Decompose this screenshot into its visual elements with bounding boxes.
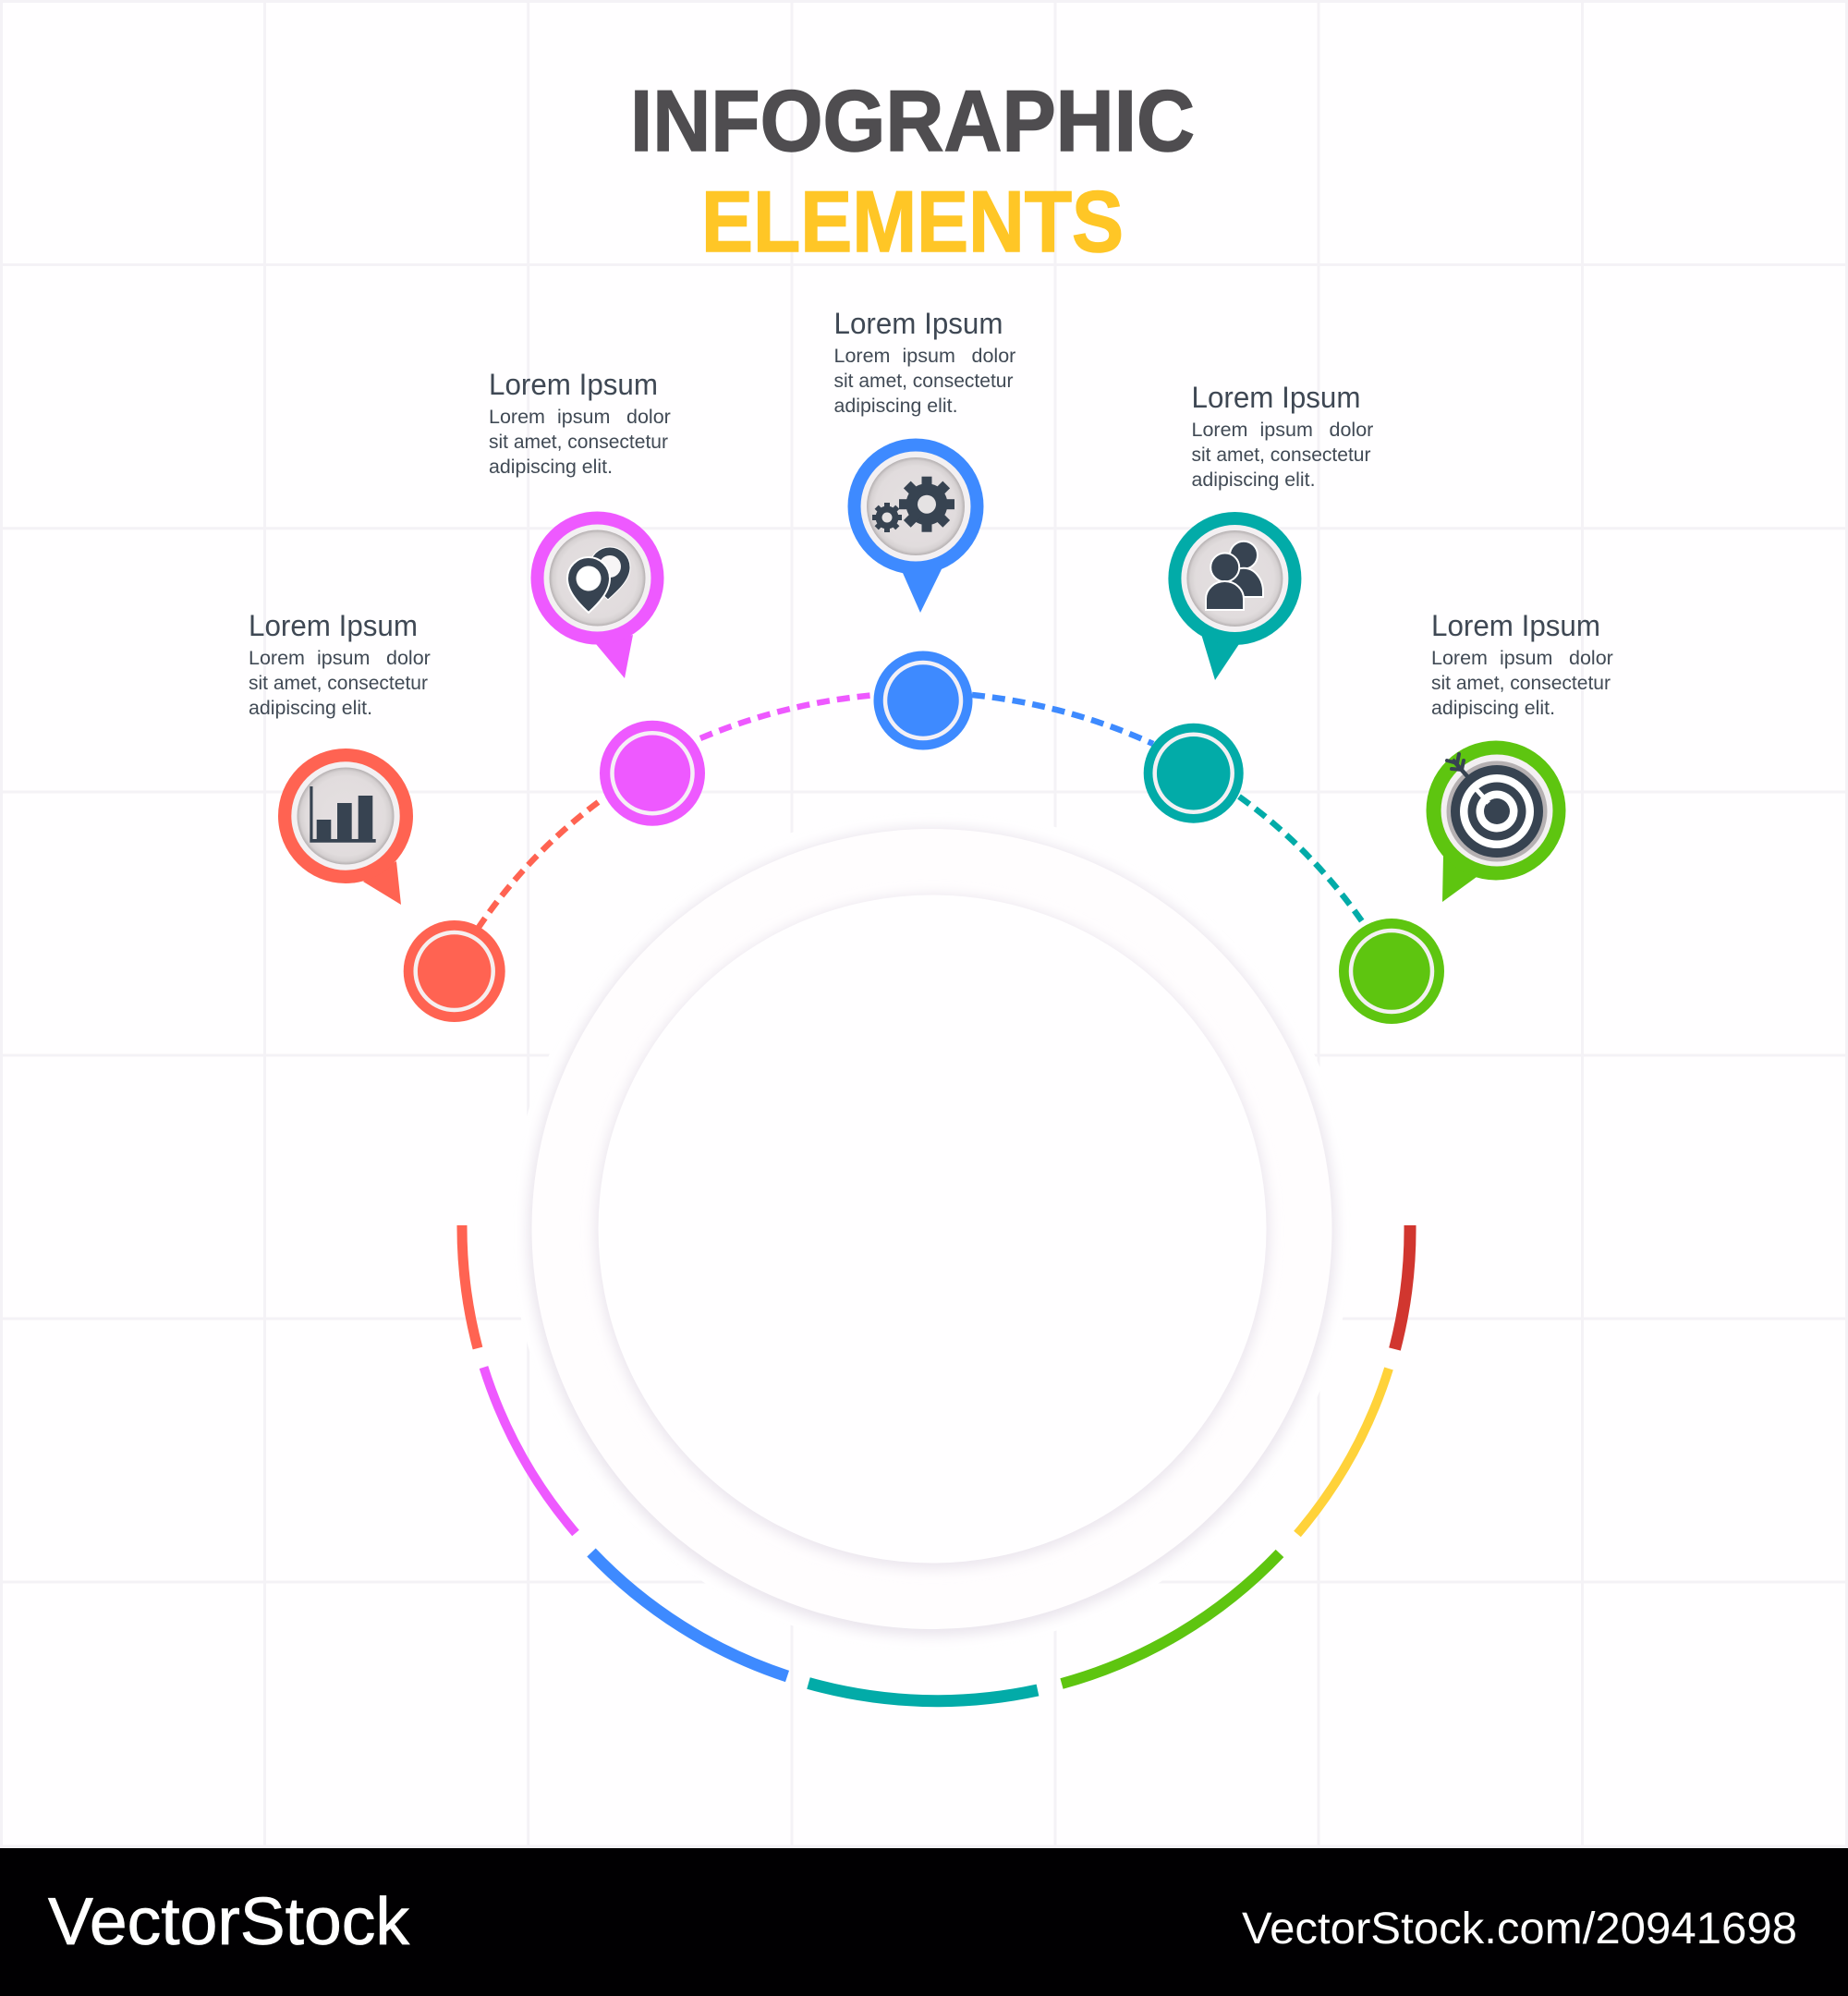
text block 4: Lorem [1192,419,1247,441]
panel: step 2 [489,368,705,826]
text block 5: Lorem [1431,647,1488,669]
panel: step 4 [1144,381,1373,823]
footer banner [0,1848,1848,1996]
footer banner: VectorStock.com/20941698 [1242,1905,1797,1953]
node 3 [874,651,972,750]
panel: step 5 [1339,609,1613,1024]
outer segmented arc [462,1225,1410,1701]
text block 2: sit amet, consectetur [489,431,668,453]
text block 1: sit amet, consectetur [249,672,428,694]
central circle [512,809,1353,1649]
pin with target icon [1427,741,1565,902]
node 5 [1339,919,1444,1024]
node 1 [404,920,505,1022]
text block 1: Lorem [249,647,305,669]
text block 5: ipsum [1500,647,1552,669]
text block 3: Lorem Ipsum [833,307,1003,340]
text block 1: adipiscing elit. [249,697,372,719]
text block 4 [1192,381,1373,491]
text block 2: ipsum [557,406,610,428]
pin with bar chart icon [278,748,413,905]
text block 2 [489,368,671,478]
text block 2: Lorem Ipsum [489,368,658,401]
text block 1 [249,609,431,719]
text block 3: adipiscing elit. [833,395,957,417]
node 4 [1144,724,1244,823]
text block 4: sit amet, consectetur [1192,444,1371,466]
pin with location markers icon [530,512,663,678]
node 2 [600,721,705,826]
text block 5: sit amet, consectetur [1431,672,1611,694]
dashed connectors [478,695,1362,929]
title [630,72,1195,270]
text block 5: dolor [1569,647,1613,669]
text block 5: Lorem Ipsum [1431,609,1600,642]
text block 4: adipiscing elit. [1192,469,1316,491]
text block 3 [833,307,1015,417]
text block 2: adipiscing elit. [489,456,613,478]
pin with people icon [1168,512,1301,680]
text block 5: adipiscing elit. [1431,697,1555,719]
title: ELEMENTS [701,173,1124,270]
text block 1: Lorem Ipsum [249,609,418,642]
pin with gears icon [848,438,983,613]
panel: step 3 [833,307,1015,750]
text block 2: dolor [626,406,671,428]
text block 4: dolor [1329,419,1373,441]
panel: step 1 [249,609,505,1022]
footer banner: VectorStock [48,1885,410,1959]
text block 5 [1431,609,1613,719]
title: INFOGRAPHIC [630,72,1195,169]
text block 2: Lorem [489,406,545,428]
text block 4: ipsum [1260,419,1313,441]
text block 3: dolor [972,345,1015,367]
text block 3: ipsum [902,345,955,367]
text block 4: Lorem Ipsum [1192,381,1360,414]
text block 1: ipsum [317,647,370,669]
text block 3: Lorem [833,345,890,367]
text block 3: sit amet, consectetur [833,370,1013,392]
text block 1: dolor [386,647,431,669]
